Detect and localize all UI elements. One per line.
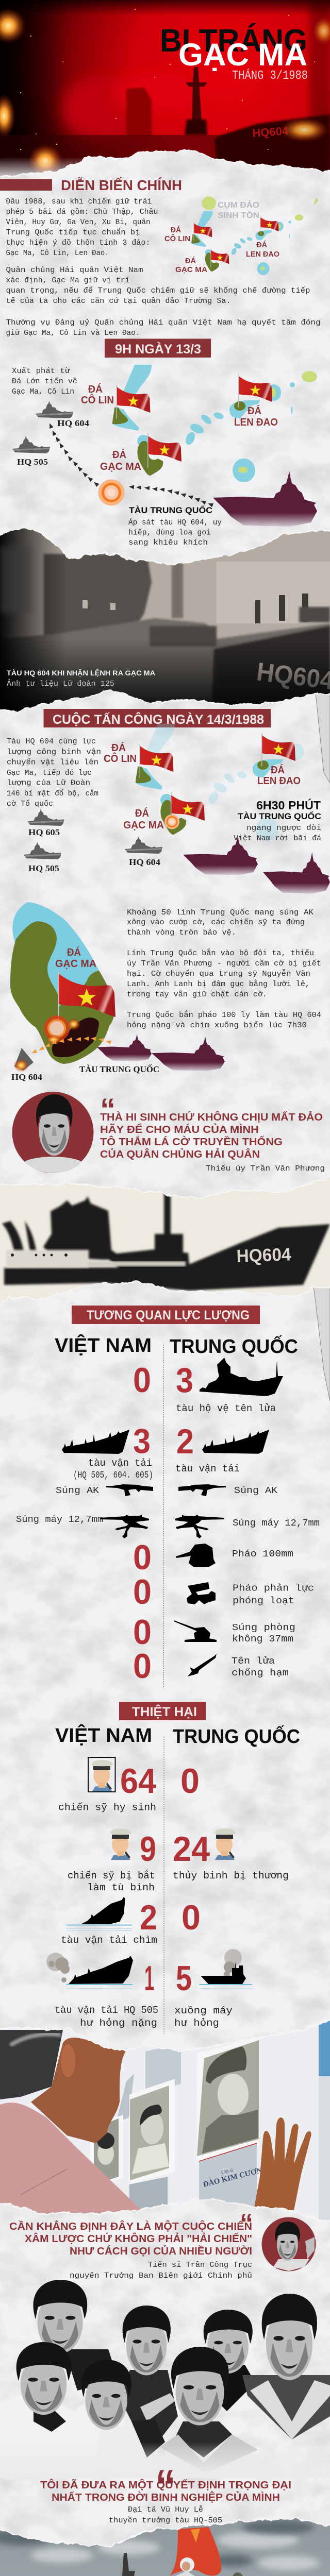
text: xuất phát: Đá Lớn tiến về	[12, 377, 77, 386]
ships: HQ 605, 505, 604	[24, 809, 162, 873]
heading: thiệt hại: THIỆT HẠI	[132, 1704, 197, 1719]
row: súng AK: Súng AK	[56, 1486, 99, 1496]
ships: HQ 605, 505, 604: HQ 604	[129, 857, 161, 867]
row: tàu chìm: 0	[182, 1898, 201, 1937]
ships HQ 604 and HQ 505	[12, 401, 90, 467]
small map: Sinh Tồn cluster: CỤM ĐẢO	[218, 200, 259, 210]
small map: Sinh Tồn cluster: ĐÁ	[171, 226, 181, 234]
row: tàu vận tải: 2	[176, 1422, 194, 1461]
row: tù binh, bị thương: 24	[173, 1829, 210, 1869]
map: 13/3 movements: CÔ LIN	[81, 394, 114, 406]
row: tù binh, bị thương: làm tù binh	[87, 1882, 155, 1893]
photo: ship HQ604	[0, 1177, 330, 1307]
row: súng máy: Súng máy 12,7mm	[16, 1515, 103, 1525]
text block: intro: Trung Quốc tiếp tục chuẩn bị	[6, 228, 140, 237]
row: tàu chìm: tàu vận tải chìm	[61, 1935, 157, 1946]
map: 14/3 attack: CÔ LIN	[104, 752, 137, 765]
quote: Trần Văn Phương: Thiếu úy Trần Văn Phương	[206, 1164, 325, 1173]
row: hư hỏng: hư hỏng nặng	[80, 2018, 157, 2029]
row: súng phòng không	[133, 1613, 295, 1652]
icon: Chinese ship	[213, 471, 317, 527]
quote: Trần Công Trục	[9, 2209, 316, 2280]
heading: 9h ngày 13/3	[105, 339, 211, 358]
text block: HQ 604 transport: 146 bí mật đổ bộ, cắm	[7, 789, 98, 798]
row: súng phòng không: không 37mm	[232, 1634, 293, 1645]
column titles: losses: VIỆT NAM	[55, 1724, 152, 1747]
heading: diễn biến chính: DIỄN BIẾN CHÍNH	[61, 177, 182, 193]
row: pháo phản lực: phóng loạt	[233, 1596, 294, 1606]
title: BI TRÁNG GẠC MA: GẠC MA	[178, 37, 307, 72]
map: 14/3 attack: ĐÁ	[135, 807, 149, 819]
row: hư hỏng: 5	[176, 1959, 192, 1998]
icon: sinking HQ 604	[11, 1048, 43, 1082]
text: xuất phát	[12, 367, 77, 396]
text block: chiến đấu: xông vào cướp cờ, các chiến sỹ ta đứng	[127, 918, 305, 927]
column titles: force comparison: VIỆT NAM	[55, 1334, 152, 1357]
text block: HQ 604 transport: Tàu HQ 604 cùng lực	[7, 738, 96, 746]
map: 14/3 attack: LEN ĐAO	[257, 775, 301, 787]
text block: chiến đấu: Trung Quốc bắn pháo 100 ly làm tàu HQ 604	[127, 1010, 321, 1020]
title: BI TRÁNG GẠC MA: BI TRÁNG	[160, 23, 307, 59]
row: tàu vận tải	[62, 1421, 269, 1481]
caption: HQ 604 photo: TÀU HQ 604 KHI NHẬN LỆNH RA GẠC MA	[7, 668, 155, 677]
text block: intro: giữ Gạc Ma, Cô Lin và Len Đao.	[6, 329, 140, 337]
quote: Trần Văn Phương	[12, 1092, 325, 1173]
text block: chiến đấu: thành vòng tròn bảo vệ.	[127, 929, 236, 937]
painting: battle of Gạc Ma	[0, 2509, 330, 2576]
text: 6h30 phút: ngang ngược đòi	[246, 824, 321, 833]
text block: HQ 604 transport: cờ Tổ quốc	[7, 800, 53, 808]
small map: Sinh Tồn cluster: ĐÁ	[256, 241, 267, 249]
small map: Sinh Tồn cluster: CÔ LIN	[164, 234, 190, 243]
text block: chiến đấu: trong tay vẫn giữ chặt cán cờ.	[127, 990, 267, 999]
caption: HQ 604 photo	[7, 668, 155, 688]
text: xuất phát: Xuất phát từ	[12, 367, 70, 376]
row: tên lửa chống hạm	[133, 1647, 289, 1686]
text: tàu trung quốc 13/3: sang khiêu khích	[128, 539, 208, 547]
heading: 9h ngày 13/3: 9H NGÀY 13/3	[115, 342, 201, 357]
text block: intro	[6, 197, 320, 337]
small map: Sinh Tồn cluster	[164, 196, 318, 275]
row: tàu hộ vệ tên lửa: tàu hộ vệ tên lửa	[176, 1403, 276, 1414]
quote: Vũ Huy Lễ: TÔI ĐÃ ĐƯA RA MỘT QUYẾT ĐỊNH TRỌNG ĐẠI	[40, 2479, 291, 2491]
text block: intro: tế của ta cho các căn cứ tại quần đảo Trường Sa.	[6, 297, 231, 306]
row: pháo phản lực	[133, 1572, 314, 1612]
map: 14/3 attack: ĐÁ	[111, 742, 126, 754]
arrow: HQ 604 to collision point	[51, 426, 96, 484]
quote: Trần Văn Phương: CỦA QUÂN CHỦNG HẢI QUÂN	[100, 1148, 260, 1160]
quote: Trần Công Trục: NHƯ CÁCH GỌI CỦA NHIỀU NGƯỜI	[70, 2245, 252, 2257]
quote: Vũ Huy Lễ: thuyền trưởng tàu HQ-505	[109, 2516, 222, 2525]
title: BI TRÁNG GẠC MA: THÁNG 3/1988	[232, 69, 308, 83]
ships HQ 604 and HQ 505: HQ 604	[57, 418, 90, 428]
row: tên lửa chống hạm: chống hạm	[232, 1668, 289, 1679]
photo: sailors group	[0, 2280, 330, 2478]
row: tàu vận tải: tàu vận tải	[175, 1463, 240, 1475]
quote: Trần Công Trục: CẦN KHẲNG ĐỊNH ĐÂY LÀ MỘT CUỘC CHIẾN	[9, 2220, 252, 2232]
row: chiến sỹ hy sinh: 0	[180, 1761, 200, 1801]
photo: HQ 604 departing	[0, 515, 330, 721]
row: pháo phản lực: 0	[133, 1572, 152, 1612]
quote: Vũ Huy Lễ: NHẤT TRONG ĐỜI BINH NGHIỆP CỦA MÌNH	[52, 2491, 280, 2503]
text: xuất phát: Gạc Ma, Cô Lin	[12, 388, 74, 396]
row: tù binh, bị thương	[68, 1828, 289, 1893]
quote: Vũ Huy Lễ: “	[155, 2461, 176, 2513]
portrait	[262, 2217, 316, 2271]
arrow: Chinese ship to collision point	[131, 487, 210, 504]
quote: Trần Công Trục: nguyên Trưởng Ban Biên giới Chính phủ	[70, 2272, 252, 2280]
map: 13/3 movements	[81, 365, 317, 482]
row: tàu hộ vệ tên lửa	[133, 1358, 283, 1414]
photo: mother at memorial wall: ĐÀO KIM CƯƠNG	[202, 2164, 269, 2189]
text block: chiến đấu: Khoảng 50 lính Trung Quốc mang súng AK	[127, 908, 314, 917]
text: 6h30 phút: 6H30 PHÚT	[256, 798, 321, 812]
ships: HQ 605, 505, 604: HQ 605	[28, 827, 60, 837]
map: Gạc Ma reef close-up: GẠC MA	[55, 958, 96, 970]
row: pháo 100mm	[133, 1538, 293, 1577]
row: pháo 100mm: 0	[133, 1538, 152, 1577]
row: tàu chìm	[61, 1897, 201, 1946]
icon: sinking HQ 604: HQ 604	[11, 1072, 43, 1082]
heading: cuộc tấn công: CUỘC TẤN CÔNG NGÀY 14/3/1988	[53, 711, 264, 727]
text block: HQ 604 transport: Gạc Ma, tiếp đó lực	[7, 769, 92, 777]
text block: chiến đấu: Lanh. Anh Lanh bị đâm gục bằng lưỡi lê,	[127, 979, 310, 989]
photo: mother at memorial wall: Liệt sĩ	[221, 2167, 234, 2175]
row: súng AK: Súng AK	[234, 1486, 277, 1496]
caption: HQ 604 photo: Ảnh tư liệu Lữ đoàn 125	[7, 679, 114, 688]
text: 6h30 phút	[234, 798, 321, 843]
column titles: force comparison	[55, 1334, 298, 1358]
title: BI TRÁNG GẠC MA	[160, 23, 308, 83]
row: hư hỏng: hư hỏng	[174, 2018, 219, 2029]
text block: intro: thực hiện ý đồ thôn tính 3 đảo:	[6, 239, 151, 247]
row: tù binh, bị thương: 9	[140, 1829, 156, 1869]
text block: HQ 604 transport: lượng công binh vận	[7, 748, 101, 756]
row: tàu hộ vệ tên lửa: 3	[176, 1361, 193, 1400]
text block: intro: Thường vụ Đảng uỷ Quân chủng Hải quân Việt Nam hạ quyết tâm đóng	[6, 318, 320, 327]
quote: Trần Văn Phương: HÃY ĐỂ CHO MÁU CỦA MÌNH	[100, 1123, 259, 1136]
hero image: burning ship	[0, 0, 330, 177]
map: 13/3 movements: GẠC MA	[100, 461, 141, 472]
row: tàu hộ vệ tên lửa: 0	[133, 1361, 151, 1400]
row: tàu vận tải: (HQ 505, 604. 605)	[73, 1470, 153, 1481]
map: 14/3 attack	[104, 724, 304, 841]
row: chiến sỹ hy sinh: 64	[120, 1761, 156, 1801]
small map: Sinh Tồn cluster: GẠC MA	[175, 265, 207, 274]
map: 14/3 attack: GẠC MA	[123, 820, 164, 831]
map: 13/3 movements: LEN ĐAO	[234, 417, 278, 428]
quote: Trần Văn Phương: THÀ HI SINH CHỨ KHÔNG CHỊU MẤT ĐẢO	[100, 1111, 323, 1123]
text block: chiến đấu: Lính Trung Quốc bắn vào bộ đội ta, thiếu	[127, 948, 314, 958]
photo: mother at memorial wall	[0, 2009, 330, 2226]
small map: Sinh Tồn cluster: ĐÁ	[185, 257, 196, 265]
row: hư hỏng: xuồng máy	[174, 2005, 233, 2016]
quote: Trần Công Trục: “	[240, 2209, 253, 2239]
row: chiến sỹ hy sinh: chiến sỹ hy sinh	[58, 1802, 156, 1814]
row: tên lửa chống hạm: Tên lửa	[232, 1656, 275, 1667]
text: tàu trung quốc 13/3: hiếp, dùng loa gọi	[128, 529, 211, 537]
map: 13/3 movements: ĐÁ	[112, 449, 126, 461]
quote: Vũ Huy Lễ: Đại tá Vũ Huy Lễ	[128, 2505, 203, 2514]
map: 14/3 attack: ĐÁ	[271, 764, 285, 776]
column titles: force comparison: TRUNG QUỐC	[170, 1334, 298, 1358]
row: hư hỏng	[46, 1949, 252, 2029]
text: tàu trung quốc 13/3: TÀU TRUNG QUỐC	[129, 505, 212, 515]
text: tàu trung quốc 13/3	[128, 505, 222, 547]
text: 6h30 phút: TÀU TRUNG QUỐC	[238, 811, 321, 821]
map: 13/3 movements: ĐÁ	[248, 405, 261, 417]
map: Gạc Ma reef close-up: ĐÁ	[67, 946, 81, 958]
text block: intro: xác định, Gạc Ma giữ vị trí	[6, 277, 130, 285]
small map: Sinh Tồn cluster: SINH TỒN	[218, 210, 259, 220]
row: hư hỏng: 1	[144, 1959, 154, 1998]
map: 13/3 movements: ĐÁ	[88, 383, 103, 395]
photo: ship HQ604: HQ604	[236, 1244, 292, 1266]
text: 6h30 phút: Việt Nam rời bãi đá	[234, 835, 321, 843]
heading: thiệt hại	[119, 1702, 206, 1720]
text: tàu trung quốc 13/3: Áp sát tàu HQ 604, uy	[128, 518, 222, 527]
row: súng máy: Súng máy 12,7mm	[233, 1518, 320, 1529]
row: pháo 100mm: Pháo 100mm	[232, 1549, 293, 1560]
text block: HQ 604 transport: chuyển vật liệu lên	[7, 758, 98, 767]
quote: Trần Văn Phương: “	[100, 1092, 116, 1127]
hero image: burning ship: HQ604	[252, 124, 289, 140]
row: tàu vận tải: tàu vận tải	[88, 1458, 152, 1469]
text block: intro: Gạc Ma, Cô Lin, Len Đao.	[6, 249, 109, 258]
row: tù binh, bị thương: chiến sỹ bị bắt	[68, 1870, 155, 1882]
icon: Chinese ships	[183, 836, 330, 894]
row: pháo phản lực: Pháo phản lực	[233, 1584, 314, 1594]
column titles: losses: TRUNG QUỐC	[173, 1724, 300, 1748]
row: súng phòng không: 0	[133, 1613, 152, 1652]
icon: collision target	[98, 479, 125, 506]
row: súng AK	[56, 1484, 277, 1496]
row: súng phòng không: Súng phòng	[232, 1623, 295, 1633]
ships HQ 604 and HQ 505: HQ 505	[17, 457, 48, 467]
small map: Sinh Tồn cluster: LEN ĐAO	[246, 250, 279, 259]
row: súng máy	[16, 1515, 320, 1538]
text block: HQ 604 transport	[7, 738, 101, 808]
column titles: losses	[55, 1724, 300, 1748]
heading: diễn biến chính	[0, 177, 182, 193]
row: tù binh, bị thương: thủy binh bị thương	[173, 1870, 289, 1882]
text block: chiến đấu: hỏng nặng và chìm xuống biển lúc 7h30	[127, 1021, 307, 1030]
row: tàu vận tải: 3	[133, 1421, 151, 1461]
row: chiến sỹ hy sinh	[58, 1757, 200, 1814]
text block: chiến đấu	[127, 908, 321, 1030]
text block: intro: Viên, Huy Gơ, Ga Ven, Xu Bi, quân	[6, 218, 151, 227]
row: tàu chìm: 2	[140, 1898, 157, 1937]
text block: intro: quan trọng, nếu để Trung Quốc chiếm giữ sẽ khống chế đường tiếp	[6, 286, 310, 295]
text block: chiến đấu: úy Trần Văn Phương - người cầm cờ bị giết	[127, 959, 321, 968]
quote: Trần Văn Phương: TÔ THẮM LÁ CỜ TRUYỀN THỐNG	[100, 1136, 283, 1148]
row: tên lửa chống hạm: 0	[133, 1647, 152, 1686]
icon: Chinese ships at Gạc Ma	[79, 1034, 225, 1074]
row: hư hỏng: tàu vận tải HQ 505	[55, 2005, 158, 2016]
text block: HQ 604 transport: lượng của Lữ Đoàn	[7, 779, 90, 788]
text block: chiến đấu: hại. Cờ chuyển qua trung sỹ Nguyễn Văn	[127, 969, 310, 978]
portrait	[12, 1092, 94, 1173]
quote: Trần Công Trục: Tiến sĩ Trần Công Trục	[148, 2261, 252, 2269]
text block: intro: phép 5 bãi đá gồm: Chữ Thập, Châu	[6, 208, 158, 216]
ships: HQ 605, 505, 604: HQ 505	[28, 863, 59, 873]
quote: Trần Công Trục: XÂM LƯỢC CHỨ KHÔNG PHẢI "HẢI CHIẾN"	[25, 2232, 252, 2245]
icon: Chinese ships at Gạc Ma: TÀU TRUNG QUỐC	[79, 1064, 159, 1074]
heading: tương quan lực lượng: TƯƠNG QUAN LỰC LƯỢNG	[87, 1308, 250, 1323]
text block: intro: Đầu 1988, sau khi chiếm giữ trái	[6, 197, 152, 206]
map: Gạc Ma reef close-up	[10, 902, 116, 1064]
text block: intro: Quân chủng Hải quân Việt Nam	[6, 266, 143, 275]
quote: Vũ Huy Lễ	[40, 2461, 291, 2525]
